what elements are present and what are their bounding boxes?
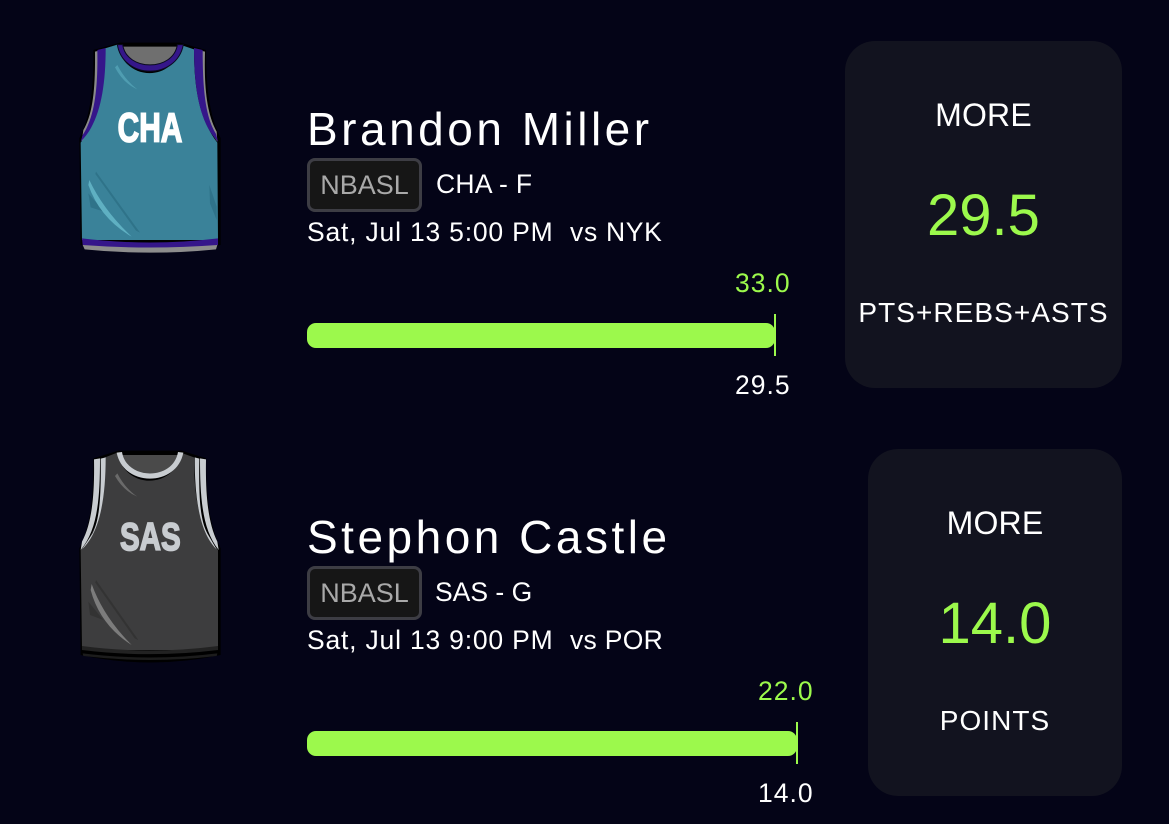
game time and opponent <box>307 217 663 247</box>
jersey label: CHA: CHA <box>118 105 182 151</box>
stat type: PTS+REBS+ASTS <box>858 297 1109 328</box>
player name: Brandon Miller: Brandon Miller <box>307 103 653 155</box>
actual value: 33.0 <box>735 268 791 298</box>
league badge: NBASL <box>320 578 409 608</box>
actual value: 22.0 <box>758 676 814 706</box>
stat type: POINTS <box>940 705 1050 736</box>
game time and opponent: vs NYK <box>570 217 663 247</box>
game time and opponent: vs POR <box>570 625 663 655</box>
team and position: SAS - G <box>435 577 532 607</box>
team and position: CHA - F <box>436 169 532 199</box>
progress bar <box>307 731 797 756</box>
line marker <box>796 722 798 764</box>
player name: Stephon Castle: Stephon Castle <box>307 511 671 563</box>
line value: 14.0 <box>758 778 814 808</box>
league badge <box>307 158 422 212</box>
game time and opponent: Sat, Jul 13 9:00 PM <box>307 625 553 655</box>
line marker <box>774 314 776 356</box>
icon: SAS jersey <box>80 450 220 662</box>
line value: 29.5 <box>735 370 791 400</box>
icon: CHA jersey <box>80 42 220 253</box>
progress bar <box>307 323 775 348</box>
pick direction: MORE <box>947 505 1043 541</box>
pick line: 29.5 <box>927 183 1040 248</box>
panel: pick card Brandon Miller <box>845 41 1122 388</box>
game time and opponent <box>307 625 663 655</box>
game time and opponent: Sat, Jul 13 5:00 PM <box>307 217 553 247</box>
league badge: NBASL <box>320 170 409 200</box>
pick line: 14.0 <box>939 591 1051 656</box>
jersey label: SAS: SAS <box>120 515 181 559</box>
pick direction: MORE <box>935 97 1032 133</box>
league badge <box>307 566 422 620</box>
panel: pick card Stephon Castle <box>868 449 1122 796</box>
